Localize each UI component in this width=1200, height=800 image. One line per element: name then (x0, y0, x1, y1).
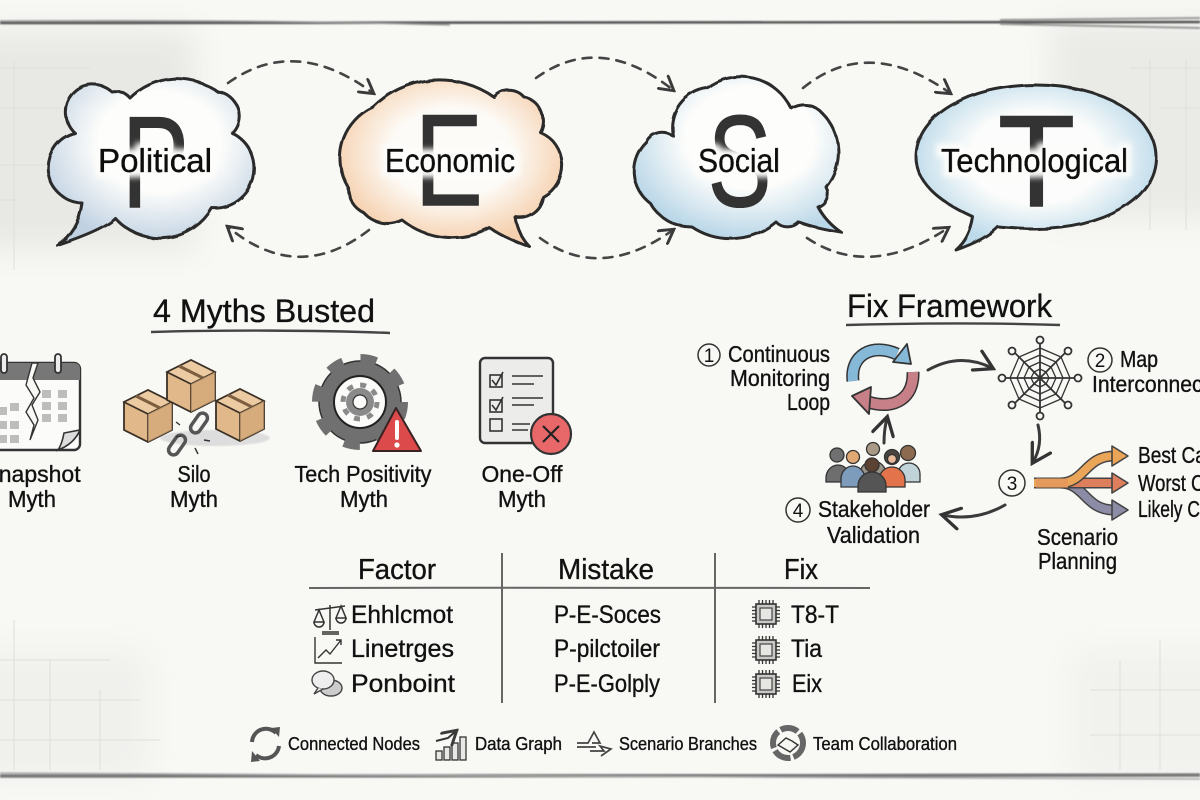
column: Factor (312, 601, 455, 698)
step 1: Continuous Monitoring Loop: Continuous (728, 341, 830, 367)
column: Fix: Eix (792, 670, 822, 698)
legend: Scenario Branches (577, 732, 757, 756)
icon: stakeholder group (826, 442, 920, 492)
step 1: Continuous Monitoring Loop: Monitoring (730, 365, 830, 391)
legend: Data Graph: Data Graph (475, 734, 562, 754)
column: Mistake (554, 601, 661, 698)
icon: monitoring loop (852, 344, 913, 414)
table: Factor Mistake Fix (309, 553, 870, 703)
legend: Scenario Branches: Scenario Branches (619, 734, 757, 754)
step 1: Continuous Monitoring Loop (698, 341, 830, 415)
myth: Tech Positivity (294, 359, 432, 512)
column: Fix (752, 600, 839, 698)
myth: Tech Positivity: Myth (340, 486, 388, 512)
table header and rules: Fix (784, 554, 818, 586)
heading: 4 Myths Busted: 4 Myths Busted (153, 293, 375, 329)
heading: Fix Framework: Fix Framework (847, 288, 1053, 324)
bubble: Technological: Technological (941, 142, 1128, 179)
step 2: Map Interconnected: 2 (1095, 351, 1105, 372)
bubble: Social: Social (698, 142, 780, 179)
column: Fix: T8-T (791, 601, 839, 629)
bubble: Technological: T (998, 89, 1075, 234)
scenario labels (1037, 442, 1200, 574)
step 4: Stakeholder Validation: Stakeholder (818, 496, 930, 522)
column: Factor: Ehhlcmot (351, 601, 453, 629)
scenario labels: Scenario (1037, 524, 1118, 550)
dashed cycle arrows (228, 58, 950, 258)
column: Fix: Tia (791, 635, 822, 663)
myth: Snapshot: Myth (8, 486, 56, 512)
myth: Tech Positivity: Tech Positivity (294, 461, 432, 487)
legend: Team Collaboration: Team Collaboration (813, 734, 957, 754)
step 4: Stakeholder Validation: Validation (827, 522, 920, 548)
bubble: Political: P (122, 89, 189, 235)
step 2: Map Interconnected: Map (1120, 346, 1158, 372)
bubble: Social: S (708, 89, 771, 235)
step 2: Map Interconnected (1088, 346, 1200, 397)
bubble: Social (634, 77, 841, 239)
legend: Team Collaboration (773, 728, 957, 758)
arrow: web to scenarios (1033, 425, 1040, 462)
table header and rules: Mistake (558, 554, 654, 586)
arrow: scenarios to stakeholders (943, 505, 1005, 517)
bubble: Technological (916, 85, 1156, 250)
myth: One-Off (480, 358, 571, 512)
icon: scenario branches (1034, 446, 1128, 520)
myth: Silo: Silo (178, 461, 210, 487)
step 4: Stakeholder Validation: 4 (793, 501, 804, 522)
myth: Snapshot (0, 354, 81, 512)
step 4: Stakeholder Validation (786, 496, 930, 548)
legend: Connected Nodes: Connected Nodes (288, 734, 420, 754)
column: Mistake: P-pilctoiler (554, 635, 660, 663)
scenario labels: Planning (1038, 548, 1117, 574)
step 3 number: 3 (1007, 474, 1017, 495)
bubble: Economic: Economic (385, 142, 515, 179)
column: Factor: Ponboint (351, 670, 455, 698)
table header and rules: Factor (358, 554, 436, 586)
column: Mistake: P-E-Golply (554, 670, 660, 698)
step 1: Continuous Monitoring Loop: Loop (787, 389, 830, 415)
step 1: Continuous Monitoring Loop: 1 (704, 346, 714, 367)
table header and rules (309, 553, 870, 703)
myth: Silo (124, 360, 270, 512)
myth: One-Off: Myth (498, 486, 546, 512)
bubble: Economic: E (415, 87, 483, 233)
bubble: Political (48, 79, 254, 245)
step 3 number (999, 470, 1025, 496)
legend: Connected Nodes (251, 727, 420, 762)
arrow: stakeholders to loop (884, 418, 887, 443)
bubble: Political: Political (98, 142, 212, 179)
column: Mistake: P-E-Soces (554, 601, 661, 629)
arrow: loop to web (928, 360, 992, 370)
column: Factor: Linetrges (351, 635, 454, 663)
legend: Data Graph (436, 731, 562, 760)
bubble: Economic (340, 80, 562, 247)
icon: spider web (998, 336, 1082, 420)
myth: Silo: Myth (170, 486, 218, 512)
myth: One-Off: One-Off (482, 461, 563, 487)
